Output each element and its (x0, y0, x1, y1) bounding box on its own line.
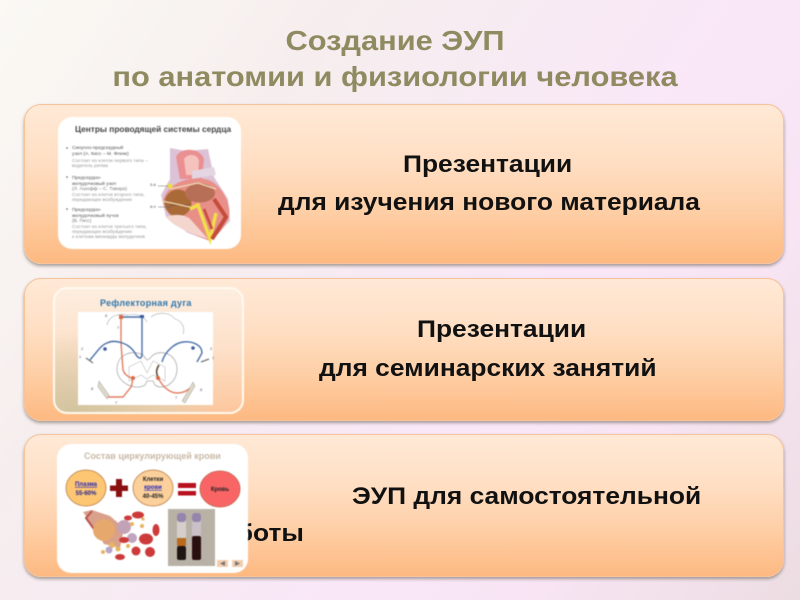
image: heart conduction system: Синусно-предсердный (72, 144, 124, 151)
heart illustration: A-V (150, 205, 156, 209)
text: EUP for independent work (206, 483, 701, 547)
image: heart conduction system: Предсердно- (72, 175, 102, 181)
image: reflex arc: 6 (105, 313, 108, 318)
cells circle: крови (144, 485, 162, 491)
image: reflex arc: 1 (212, 355, 215, 360)
image: reflex arc: Рефлекторная дуга (100, 298, 192, 308)
image: heart conduction system: желудочковый пучок (72, 212, 119, 219)
image: heart conduction system: желудочковый узел (72, 180, 116, 187)
image: heart conduction system: Центры проводящей системы сердца (75, 124, 232, 134)
image: heart conduction system: Состоит из клеток третьего типа, (72, 224, 147, 230)
panel: seminars (24, 278, 784, 421)
image: reflex arc: 8 (91, 386, 94, 391)
nav buttons (217, 560, 243, 567)
image: reflex arc: 7 (117, 325, 120, 330)
image: heart conduction system: передающих возбуждение (72, 229, 132, 235)
blood circle (200, 471, 240, 507)
image: heart conduction system: Состоит из клеток первого типа – (72, 158, 148, 164)
image: heart conduction system: (В. Гисс) (72, 218, 92, 224)
image: blood composition (57, 444, 248, 573)
title (112, 25, 678, 92)
title: Создание ЭУП (285, 25, 505, 56)
image: reflex arc: 7 (175, 395, 178, 400)
image: heart conduction system: Состоит из клеток второго типа, (72, 192, 145, 198)
text: presentations for new material: Презентации (403, 151, 572, 178)
test tubes photo (168, 509, 215, 566)
heart illustration (150, 148, 230, 241)
image: blood composition: Состав циркулирующей крови (84, 451, 221, 461)
image: reflex arc (53, 287, 244, 414)
text: presentations for seminars: для семинарских занятий (319, 355, 657, 382)
cells circle: Клетки (143, 477, 163, 483)
title: по анатомии и физиологии человека (112, 61, 678, 92)
image: heart conduction system: к клеткам миокарда желудочков (72, 235, 145, 240)
text: presentations for seminars (319, 316, 657, 382)
image: heart conduction system: Предсердно- (72, 207, 102, 213)
image: reflex arc: 2 (210, 346, 213, 351)
panel: self-study (24, 434, 784, 577)
plasma circle: Плазма (75, 482, 98, 488)
image: reflex arc: 7 (115, 400, 118, 405)
blood circle: Кровь (211, 487, 229, 493)
image: heart conduction system: узел (А. Кисс – М. Флекк) (72, 151, 129, 157)
blood vessel illustration (83, 510, 160, 560)
image: heart conduction system (58, 117, 241, 249)
image: reflex arc: 1 (79, 354, 82, 359)
cells circle (133, 470, 173, 506)
image: heart conduction system: (Л. Ашофф – С. Тавара) (72, 186, 127, 192)
heart illustration: S-A (150, 183, 156, 187)
plasma circle: 55-60% (76, 491, 97, 497)
text: presentations for new material (278, 151, 700, 216)
image: heart conduction system: передающих возбуждение (72, 197, 132, 203)
text: presentations for seminars: Презентации (417, 316, 586, 343)
text: presentations for new material: для изучения нового материала (278, 189, 700, 216)
image: heart conduction system: водитель ритма (72, 164, 108, 169)
image: reflex arc: 2 (81, 346, 84, 351)
panel: lectures (24, 104, 784, 264)
text: EUP for independent work: ЭУП для самостоятельной (352, 483, 701, 510)
text: EUP for independent work: работы (206, 520, 304, 547)
plasma circle (66, 470, 106, 506)
cells circle: 40-45% (143, 494, 164, 500)
image: reflex arc: 8 (200, 387, 203, 392)
